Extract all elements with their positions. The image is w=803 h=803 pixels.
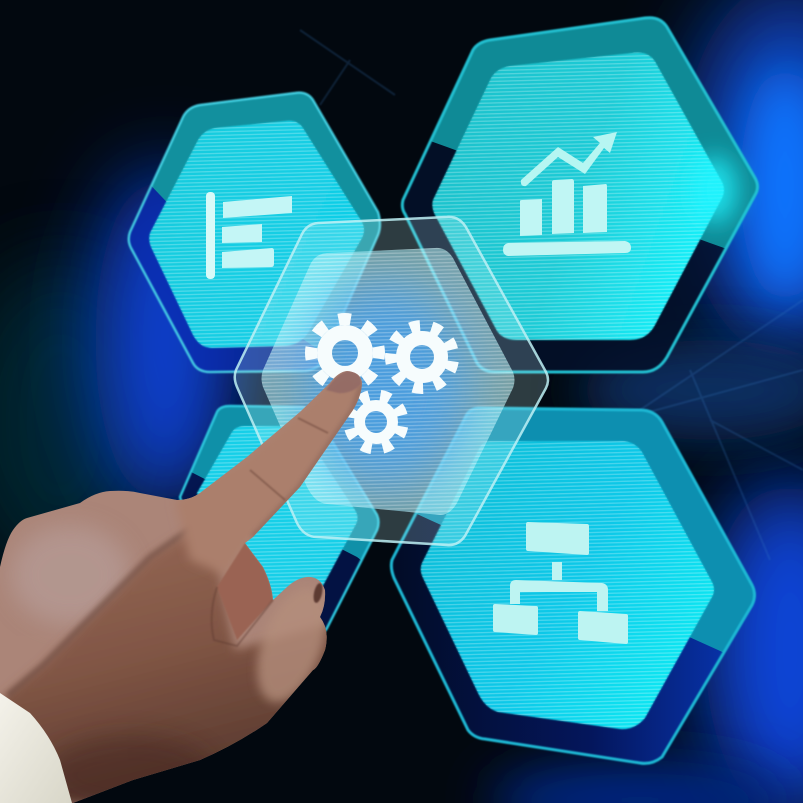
icon: gears (305, 313, 462, 453)
hand (0, 371, 362, 803)
icon: bar chart with rising arrow (503, 132, 631, 256)
icon: org chart (493, 522, 628, 644)
gap behind fingers (209, 590, 240, 648)
index finger (175, 371, 362, 575)
hexagon: top right, chart (402, 18, 758, 372)
hexagon: bottom left (180, 406, 378, 634)
middle finger (217, 543, 273, 640)
fingernail (326, 371, 361, 393)
thumb tip (312, 582, 324, 604)
hexagon: bottom right, org chart (391, 408, 754, 763)
finger shaded edge (253, 385, 362, 537)
hexagon: center, gears (235, 217, 548, 545)
wrist dark (45, 735, 215, 803)
back of hand highlight (10, 525, 130, 625)
skin base (0, 371, 362, 803)
hexagon: left, bar list (129, 93, 380, 372)
thumb lit (252, 598, 327, 706)
shirt cuff (0, 693, 72, 803)
fold lines (212, 418, 328, 646)
lower palm shadow (1, 536, 327, 803)
icon: horizontal bars (206, 192, 292, 279)
crease (8, 525, 195, 695)
